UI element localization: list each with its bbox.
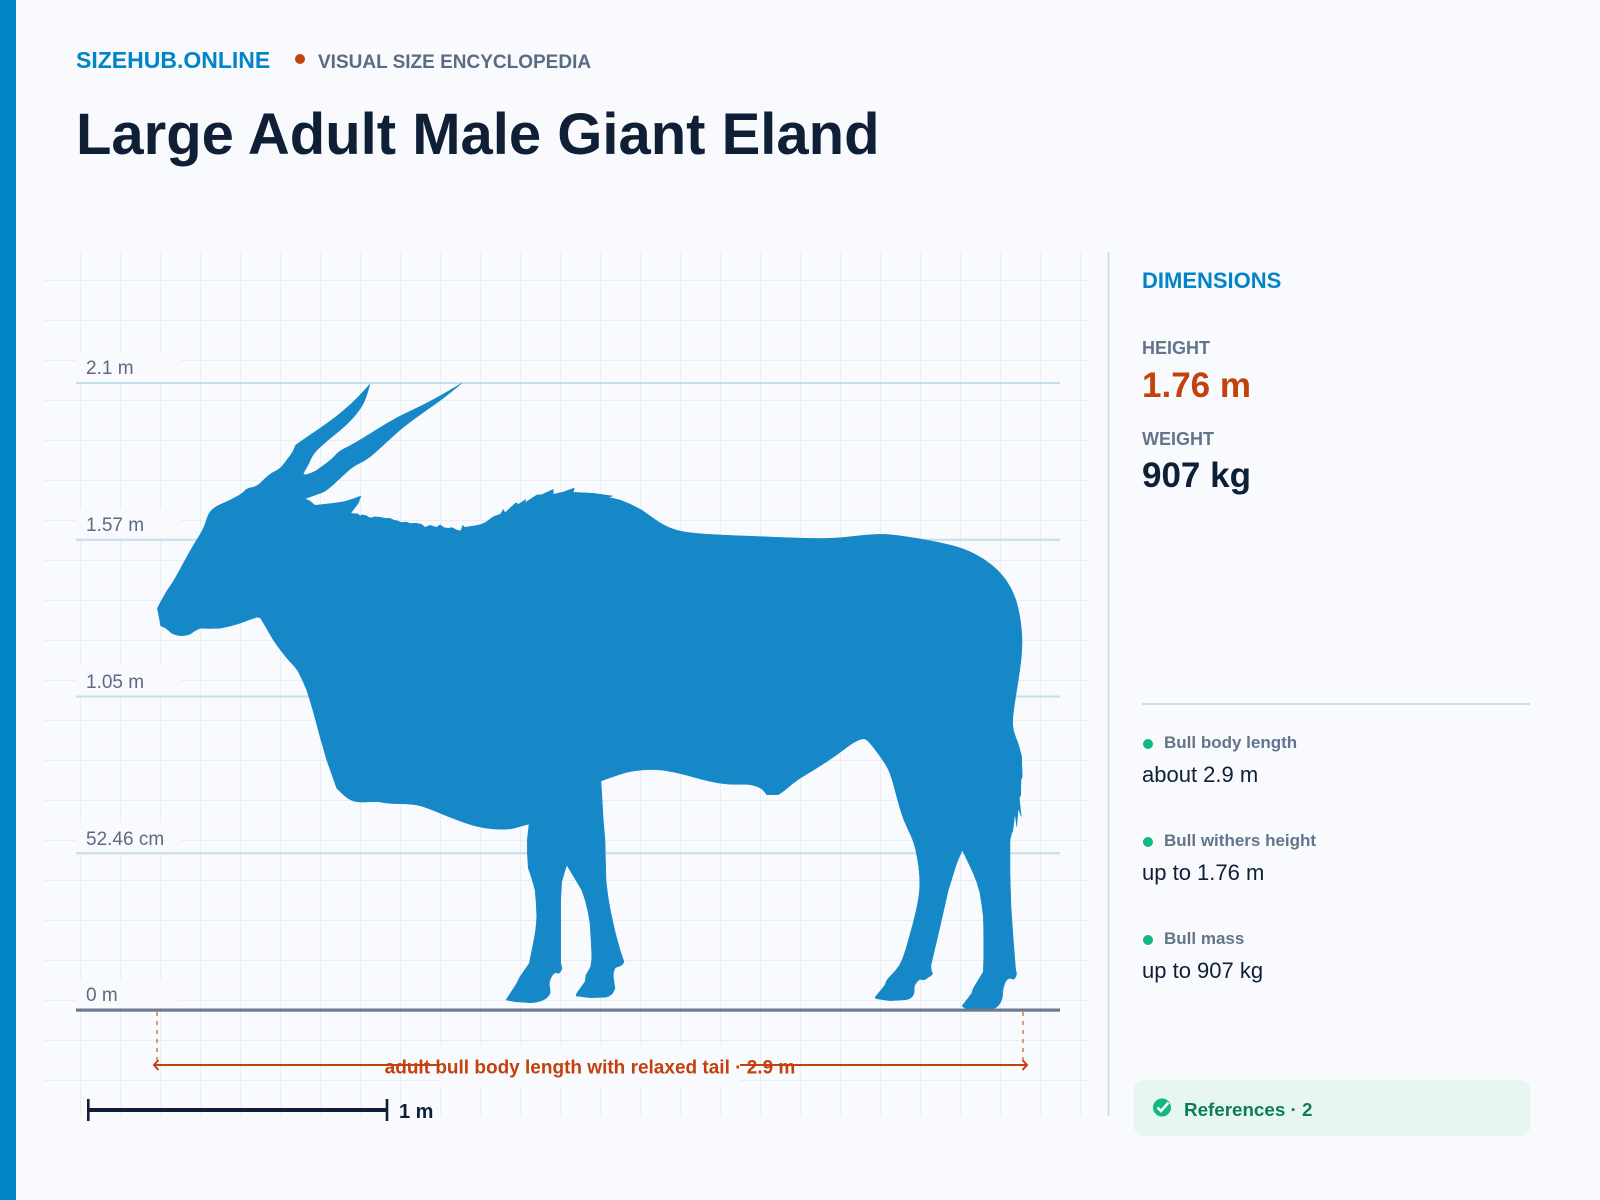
ground line [76, 1008, 1060, 1012]
weight stat: WEIGHT [1142, 429, 1214, 449]
panel: facts list [1142, 733, 1316, 983]
fact: body length [1142, 733, 1297, 787]
height stat [1142, 338, 1251, 405]
fact: mass: up to 907 kg [1142, 958, 1263, 983]
height stat: HEIGHT [1142, 338, 1210, 358]
header: brand line: VISUAL SIZE ENCYCLOPEDIA [318, 52, 591, 73]
panel: size chart [44, 252, 1089, 1123]
height gridlines and labels: 2.1 m [86, 358, 134, 379]
weight stat [1142, 429, 1251, 495]
header: brand line: SIZEHUB.ONLINE [76, 47, 270, 73]
height gridlines and labels: 1.57 m [86, 515, 144, 536]
fact: withers height [1142, 831, 1316, 885]
height gridlines and labels [76, 352, 1060, 1008]
height gridlines and labels: 1.05 m [86, 672, 144, 693]
title: Large Adult Male Giant Eland [76, 102, 880, 167]
fact: withers height: Bull withers height [1164, 831, 1316, 850]
icon: check circle [1153, 1098, 1171, 1116]
details divider [1142, 703, 1530, 705]
height gridlines and labels: 0 m [86, 985, 118, 1006]
fact: body length: Bull body length [1164, 733, 1297, 752]
panel: dimensions [1142, 268, 1281, 495]
weight stat: 907 kg [1142, 456, 1251, 495]
fact: mass [1142, 929, 1263, 983]
height gridlines and labels: 52.46 cm [86, 829, 164, 850]
left accent bar [0, 0, 16, 1200]
body length dimension [154, 1012, 1027, 1087]
fact: withers height: up to 1.76 m [1142, 860, 1264, 885]
references badge: References · 2 [1184, 1099, 1312, 1120]
panel divider [1108, 252, 1110, 1116]
height stat: 1.76 m [1142, 366, 1251, 405]
fact: body length: about 2.9 m [1142, 762, 1258, 787]
body length dimension: adult bull body length with relaxed tail · 2.9 m [385, 1058, 795, 1078]
fact: mass: Bull mass [1164, 929, 1244, 948]
scale bar [87, 1099, 433, 1123]
scale bar: 1 m [399, 1101, 433, 1123]
dimensions heading: DIMENSIONS [1142, 268, 1281, 293]
eland silhouette [157, 383, 1022, 1010]
references badge [1134, 1080, 1530, 1136]
header: brand line [76, 47, 591, 73]
